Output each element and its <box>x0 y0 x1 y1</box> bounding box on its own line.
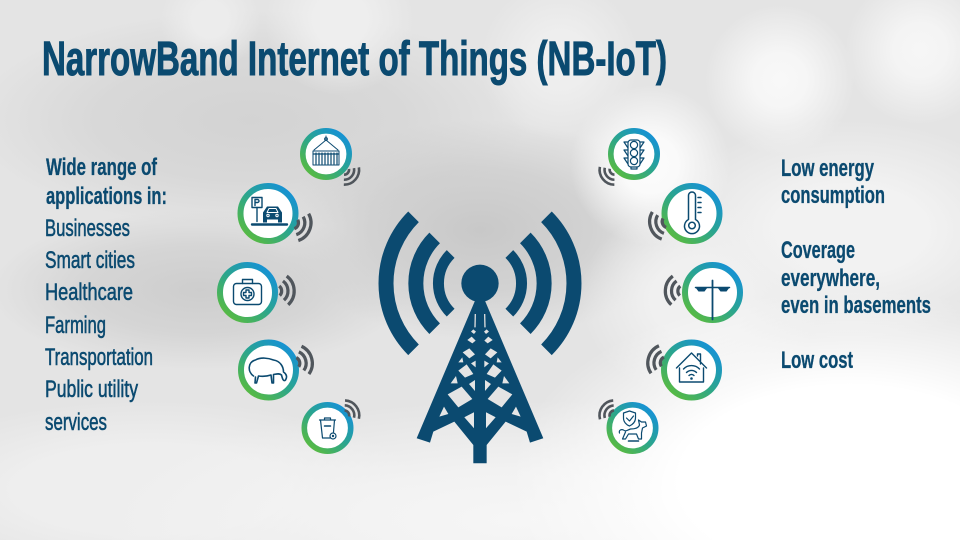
signal waves <box>279 163 681 423</box>
title: NarrowBand Internet of Things (NB-IoT) <box>42 33 667 86</box>
text block: applications <box>45 154 167 436</box>
text block: applications: Transportation <box>45 344 153 371</box>
text block: applications: Businesses <box>45 215 130 242</box>
text block: applications: Public utility <box>45 376 138 403</box>
text block: applications: applications in: <box>46 183 167 210</box>
text block: applications: Wide range of <box>46 154 158 181</box>
text block: benefits: everywhere, <box>781 265 880 292</box>
text block: applications: Farming <box>45 312 106 339</box>
icon: traffic light <box>611 131 657 177</box>
icon: cell tower with radio waves <box>386 217 574 463</box>
icon: shipping container <box>303 131 349 177</box>
text block: applications: services <box>45 409 107 436</box>
text block: applications: Smart cities <box>45 247 135 274</box>
icon: street lamp <box>685 265 740 320</box>
icon: parking <box>240 186 296 241</box>
icon: smart home <box>664 342 719 398</box>
icon: dog with shield <box>609 405 656 451</box>
icon: waste bin <box>304 405 351 451</box>
icon: thermometer <box>664 186 720 241</box>
icon: first aid kit <box>220 265 275 320</box>
text block: applications: Healthcare <box>45 279 133 306</box>
text block: benefits: Coverage <box>781 237 855 264</box>
icon: sheep <box>241 342 296 398</box>
text block: benefits: Low energy <box>781 155 874 182</box>
text block: benefits: Low cost <box>781 347 853 374</box>
text block: benefits <box>781 155 931 374</box>
text block: benefits: consumption <box>781 182 885 209</box>
